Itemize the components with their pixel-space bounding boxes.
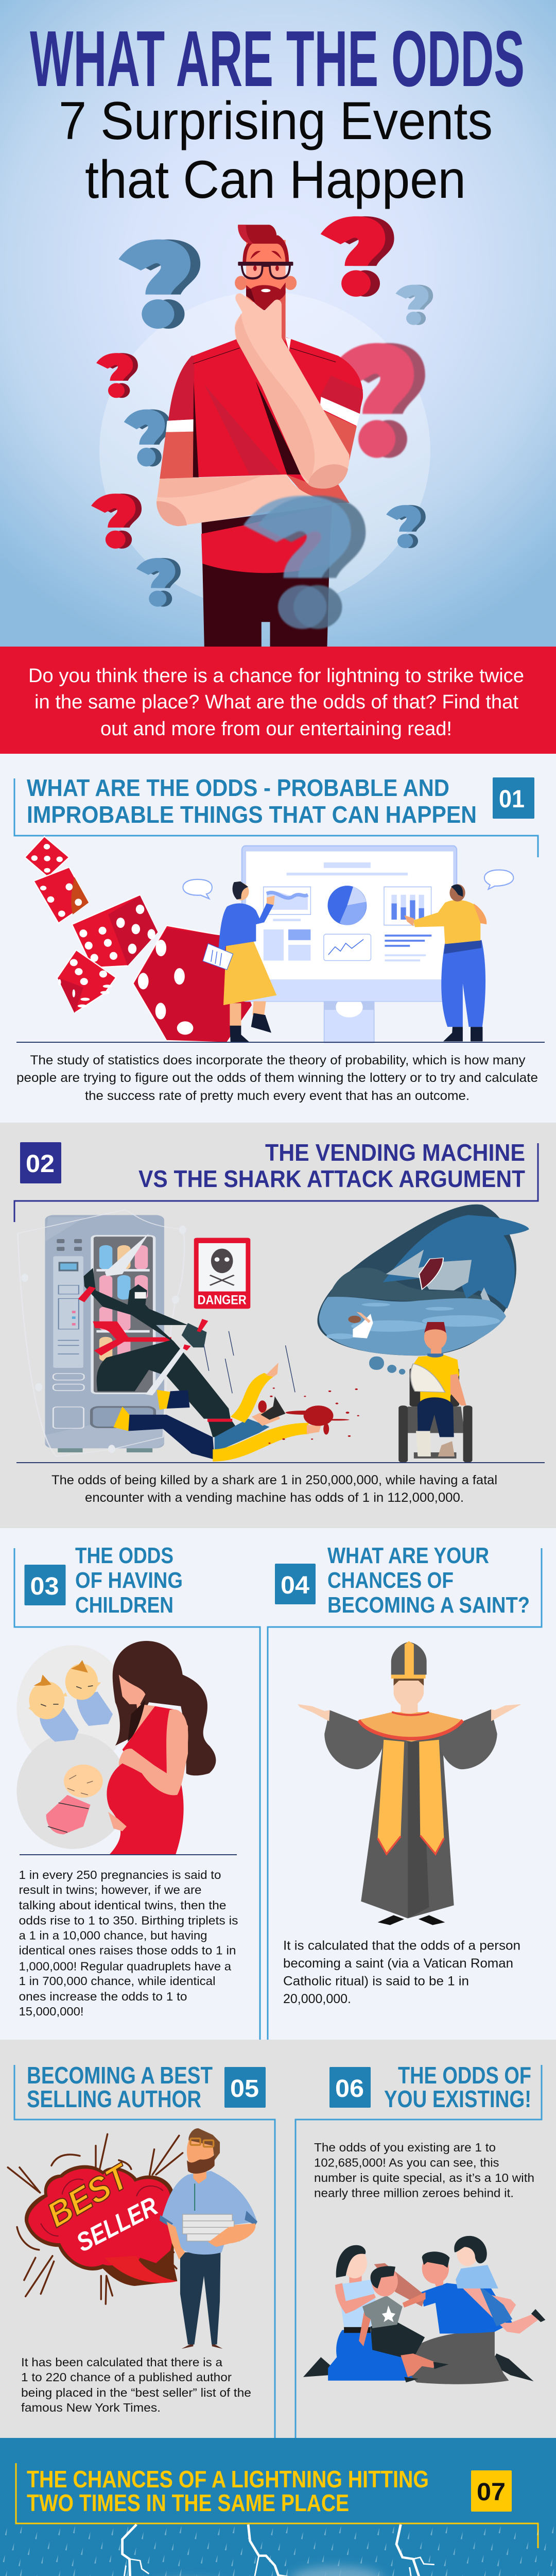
text block: section 04: It is calculated that the odds of a person [283,1939,520,1953]
text block: section 02 [16,1462,545,1505]
illustration: vending machine and shark [18,1205,529,1463]
panel: section 03 and 04 [0,1528,556,2040]
heading: section 03: OF HAVING [75,1568,183,1593]
badge 02: 02 [26,1150,55,1178]
text block: section 01: people are trying to figure out the odds of them winning the lottery or to try and calculate [16,1071,538,1085]
icon: speech bubbles [183,870,513,899]
badge 03 [25,1565,66,1605]
icon: baby in pink wrap [46,1765,103,1834]
text block: section 06: The odds of you existing are 1 to [314,2141,496,2154]
person: author holding papers [160,2128,257,2349]
heading: section 01: WHAT ARE THE ODDS - PROBABLE AND [27,774,449,801]
badge 07 [471,2470,512,2512]
panel: section 05 and 06 [0,2040,556,2438]
icon: best seller burst: SELLER [72,2191,162,2258]
man figure [157,225,363,647]
heading: section 02: THE VENDING MACHINE [265,1139,525,1166]
icon: blood splatter [258,1387,359,1444]
text block: intro: out and more from our entertaining read! [100,718,452,740]
heading: section 05: SELLING AUTHOR [27,2086,201,2112]
badge 07: 07 [477,2479,506,2506]
heading: section 06: YOU EXISTING! [384,2086,531,2112]
heading: section 03: THE ODDS [75,1543,173,1568]
subtitle [59,91,493,210]
text block: section 03: 1 in 700,000 chance, while identical [19,1974,215,1988]
heading: section 06: THE ODDS OF [398,2062,531,2089]
icon: twin babies [28,1660,113,1742]
illustration: storm and telescope [0,2524,556,2576]
text block: section 03: result in twins; however, if we are [19,1883,202,1896]
text block: intro [28,665,524,740]
motion lines [204,1331,295,1393]
text block: section 02: encounter with a vending machine has odds of 1 in 112,000,000. [85,1490,464,1505]
text block: section 03: identical ones raises those odds to 1 in [19,1944,236,1957]
heading: section 02: VS THE SHARK ATTACK ARGUMENT [138,1165,525,1192]
text block: section 06: number is quite special, as it’s a 10 with [314,2171,534,2184]
icon: best seller burst [8,2134,183,2304]
heading: section 07 [27,2466,429,2516]
heading: section 04: CHANCES OF [327,1568,454,1593]
badge 05: 05 [230,2075,259,2103]
illustration: saint with mitre [298,1641,522,1925]
text block: section 01: The study of statistics does incorporate the theory of probability, which is how many [30,1053,526,1067]
text block: section 03 [19,1854,238,2018]
text block: section 04: 20,000,000. [283,1992,351,2006]
text block: section 03: ones increase the odds to 1 to [19,1990,187,2003]
heading: section 04: BECOMING A SAINT? [327,1592,530,1618]
badge 01 [493,777,534,819]
heading: section 01: IMPROBABLE THINGS THAT CAN HAPPEN [27,801,477,828]
panel: hero [0,0,556,647]
text block: section 05: famous New York Times. [21,2401,161,2414]
badge 04 [275,1564,316,1604]
icon: danger sign [194,1238,250,1309]
text block: section 05: It has been calculated that there is a [21,2355,222,2369]
person: man presenting [404,884,486,1041]
heading: section 03: CHILDREN [75,1592,173,1618]
icon: computer monitor with charts [242,846,457,1043]
text block: section 03: 15,000,000! [19,2005,83,2018]
badge 06: 06 [335,2075,364,2103]
person: pregnant woman [107,1641,216,1855]
heading: section 04 [327,1543,530,1618]
text block: section 06 [314,2141,534,2200]
text block: section 02: The odds of being killed by a shark are 1 in 250,000,000, while having a fatal [51,1473,497,1487]
text block: section 05: 1 to 220 chance of a published author [21,2370,232,2384]
text block: section 03: 1 in every 250 pregnancies is said to [19,1868,221,1882]
icon: shark thought bubble [317,1205,529,1375]
panel: section 02 [0,1123,556,1528]
panel: section 01 [0,754,556,1123]
person: fallen victim [113,1363,321,1462]
text block: intro: in the same place? What are the odds of that? Find that [34,691,518,713]
clouds [39,2566,496,2576]
illustration: thinking man with question marks [91,216,433,647]
heading: section 02 [138,1139,525,1192]
badge 05 [224,2067,266,2108]
illustration: happy family [303,2236,545,2384]
text block: section 05 [21,2355,251,2414]
person: mother [303,2245,534,2381]
subtitle: 7 Surprising Events [59,91,493,151]
icon: lightning bolts [65,2524,458,2576]
person: ninja [78,1233,243,1437]
heading: section 01 [27,774,477,828]
person: son [359,2266,448,2382]
icon: vending machine [18,1210,186,1456]
badge 01: 01 [499,786,525,813]
text block: section 03: a 1 in a 10,000 chance, but having [19,1929,207,1942]
person: daughter on back [454,2236,545,2334]
icon: danger sign: DANGER [198,1294,247,1308]
text block: section 05: being placed in the “best seller” list of the [21,2386,251,2399]
icon: dice [25,836,252,1043]
icon: large translucent question mark [244,496,366,629]
icon: best seller burst: BEST [41,2156,137,2235]
subtitle: that Can Happen [85,150,466,210]
text block: intro: Do you think there is a chance for lightning to strike twice [28,665,524,687]
text block: section 03: talking about identical twins, then the [19,1899,227,1912]
badge 03: 03 [30,1573,59,1600]
illustration: pregnant woman and babies [16,1641,216,1855]
heading: section 04: WHAT ARE YOUR [327,1543,489,1568]
text block: section 03: odds rise to 1 to 350. Birthing triplets is [19,1913,238,1927]
person: woman presenting [203,882,276,1043]
text block: section 04: becoming a saint (via a Vatican Roman [283,1956,513,1971]
text block: section 01 [16,1042,545,1103]
badge 02 [20,1142,61,1183]
text block: section 04 [283,1939,520,2006]
badge 04: 04 [281,1572,309,1599]
text block: section 04: Catholic ritual) is said to be 1 in [283,1974,469,1989]
heading: section 03 [75,1543,183,1618]
text block: section 03: 1,000,000! Regular quadruplets have a [19,1960,231,1973]
heading: section 06 [384,2062,531,2112]
illustration: dice and statistics screen [25,836,513,1043]
badge 06 [329,2067,371,2108]
heading: section 07: TWO TIMES IN THE SAME PLACE [27,2489,349,2516]
text block: section 06: 102,685,000! As you can see, this [314,2156,499,2170]
heading: section 07: THE CHANCES OF A LIGHTNING HITTING [27,2466,429,2493]
text block: section 06: nearly three million zeroes behind it. [314,2187,514,2200]
text block: section 01: the success rate of pretty much every event that has an outcome. [85,1089,470,1103]
panel: section 07 [0,2438,556,2576]
heading: section 05: BECOMING A BEST [27,2062,213,2089]
heading: section 05 [27,2062,213,2112]
person: father [374,2251,512,2384]
icon: question marks behind the man [91,216,433,607]
person: man in wheelchair [398,1322,472,1463]
panel: intro red banner [0,647,556,754]
illustration: best seller author [8,2128,257,2349]
